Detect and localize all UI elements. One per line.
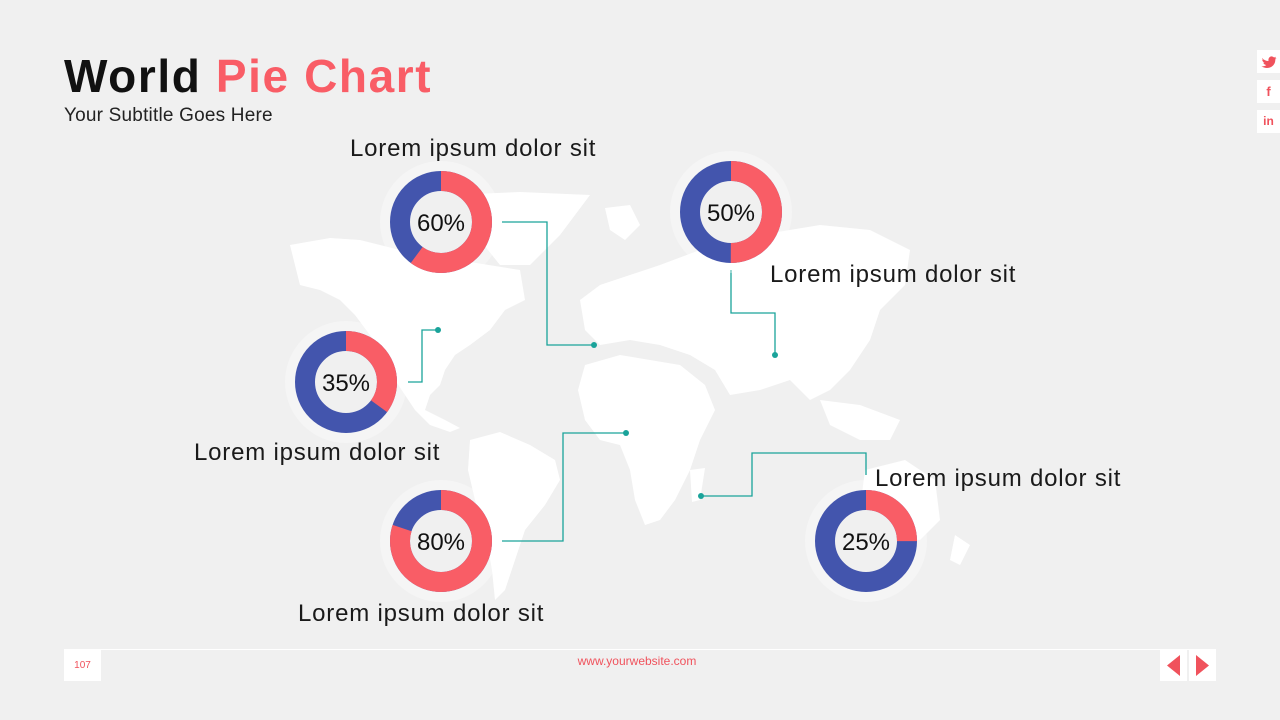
label 80%: Lorem ipsum dolor sit (298, 600, 544, 627)
title: World Pie Chart (64, 50, 432, 102)
donut 25% (805, 480, 927, 602)
social icons: f (1266, 84, 1271, 99)
label 35%: Lorem ipsum dolor sit (194, 439, 440, 466)
donut 35%: 35% (322, 370, 370, 397)
donut 80% (380, 480, 502, 602)
label 60%: Lorem ipsum dolor sit (350, 135, 596, 162)
donut 25%: 25% (842, 529, 890, 556)
subtitle: Your Subtitle Goes Here (64, 105, 273, 126)
page number: 107 (74, 660, 91, 671)
connector lines (408, 222, 866, 541)
donut 50% (670, 151, 792, 273)
nav arrows (1160, 650, 1216, 681)
label 50%: Lorem ipsum dolor sit (770, 261, 1016, 288)
donut 50%: 50% (707, 200, 755, 227)
social icons: in (1263, 114, 1274, 128)
footer line (64, 649, 1216, 650)
connector dots (435, 327, 778, 499)
donut 60%: 60% (417, 210, 465, 237)
donut 35% (285, 321, 407, 443)
website: www.yourwebsite.com (578, 654, 696, 668)
social icons (1257, 50, 1280, 133)
world map (290, 192, 970, 600)
donut 80%: 80% (417, 529, 465, 556)
label 25%: Lorem ipsum dolor sit (875, 465, 1121, 492)
donut 60% (380, 161, 502, 283)
page number (64, 650, 101, 681)
